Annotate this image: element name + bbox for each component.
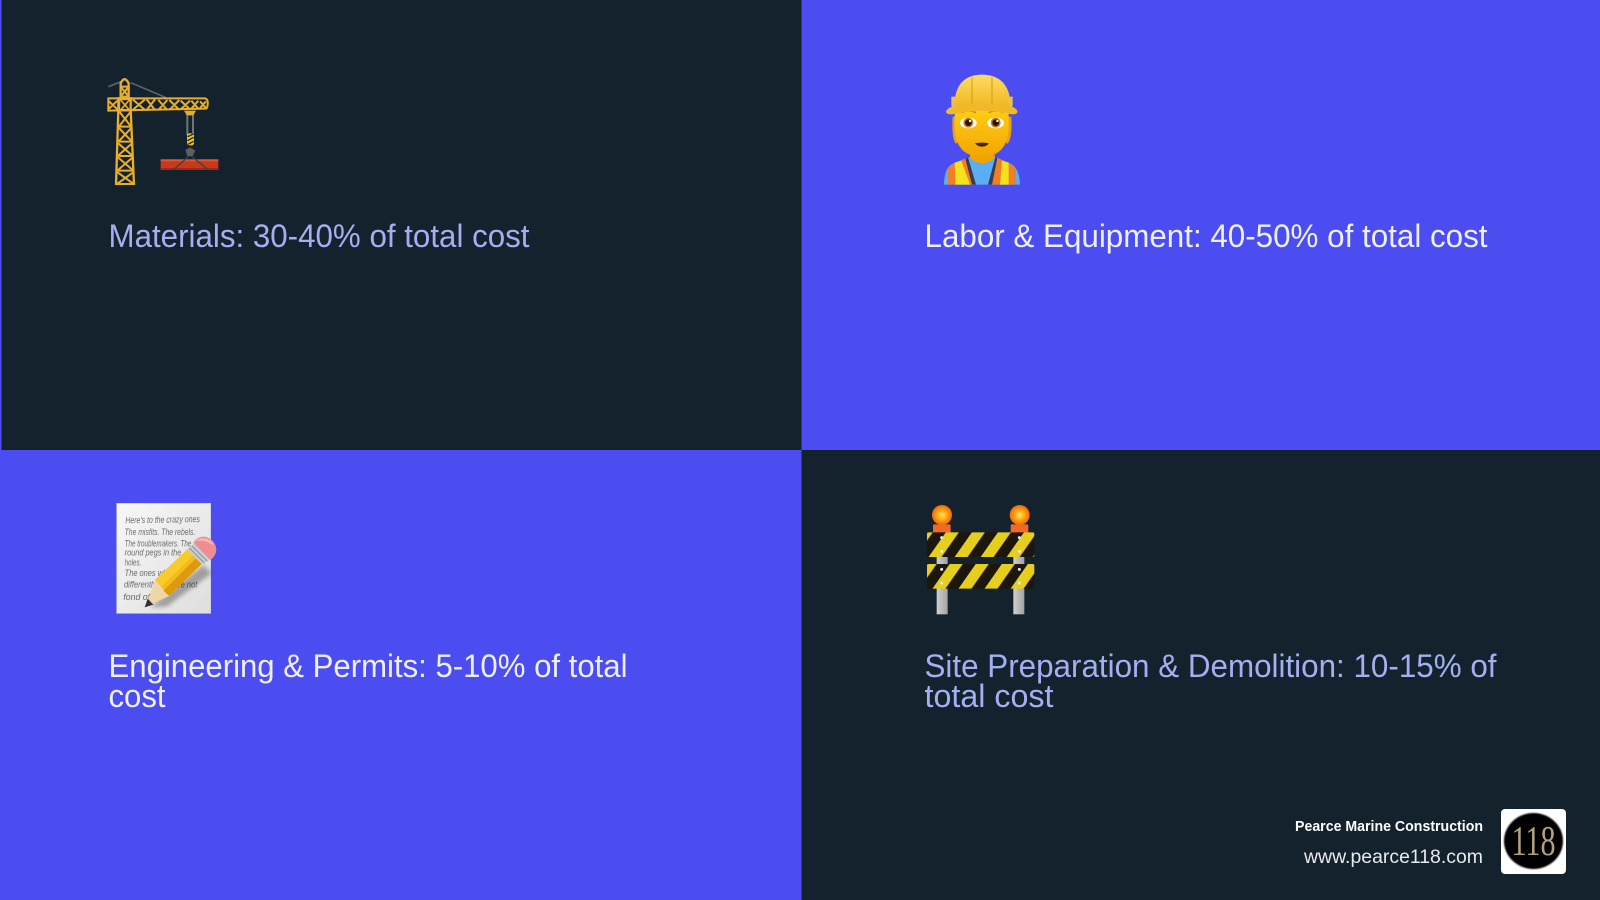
icon: memo with pencil: Here's to the crazy ones bbox=[125, 514, 200, 525]
company website: www.pearce118.com bbox=[1303, 846, 1483, 868]
icon: construction crane bbox=[108, 79, 218, 185]
icon: memo with pencil: The troublemakers. The bbox=[125, 539, 191, 549]
panel: materials bbox=[2, 0, 802, 450]
company branding bbox=[1295, 809, 1566, 874]
logo: 118: 118 bbox=[1512, 819, 1556, 865]
label: labor and equipment: Labor & Equipment: 40-50% of total cost bbox=[924, 218, 1488, 254]
label: materials: Materials: 30-40% of total cost bbox=[108, 218, 530, 254]
icon: construction barrier bbox=[927, 505, 1034, 614]
icon: memo with pencil: The ones who bbox=[125, 568, 171, 578]
panel: engineering and permits bbox=[110, 503, 626, 708]
icon: memo with pencil: The misfits. The rebels. bbox=[125, 527, 195, 537]
icon: memo with pencil: differently. They're not bbox=[124, 579, 198, 589]
panel: site preparation and demolition bbox=[802, 450, 1600, 900]
icon: memo with pencil: fond of bbox=[123, 592, 151, 602]
icon: memo with pencil bbox=[117, 503, 216, 613]
label: site preparation and demolition: total cost bbox=[924, 678, 1054, 714]
label: site preparation and demolition: Site Preparation & Demolition: 10-15% of bbox=[924, 648, 1497, 684]
label: engineering and permits: Engineering & Permits: 5-10% of total bbox=[108, 648, 628, 684]
icon: memo with pencil: holes. bbox=[125, 557, 141, 567]
icon: memo with pencil: round pegs in the bbox=[125, 548, 181, 558]
label: engineering and permits: cost bbox=[108, 678, 166, 714]
logo: 118 bbox=[1501, 809, 1566, 874]
panel: labor and equipment bbox=[802, 0, 1600, 450]
icon: construction worker bbox=[944, 75, 1020, 185]
company name: Pearce Marine Construction bbox=[1295, 819, 1483, 835]
